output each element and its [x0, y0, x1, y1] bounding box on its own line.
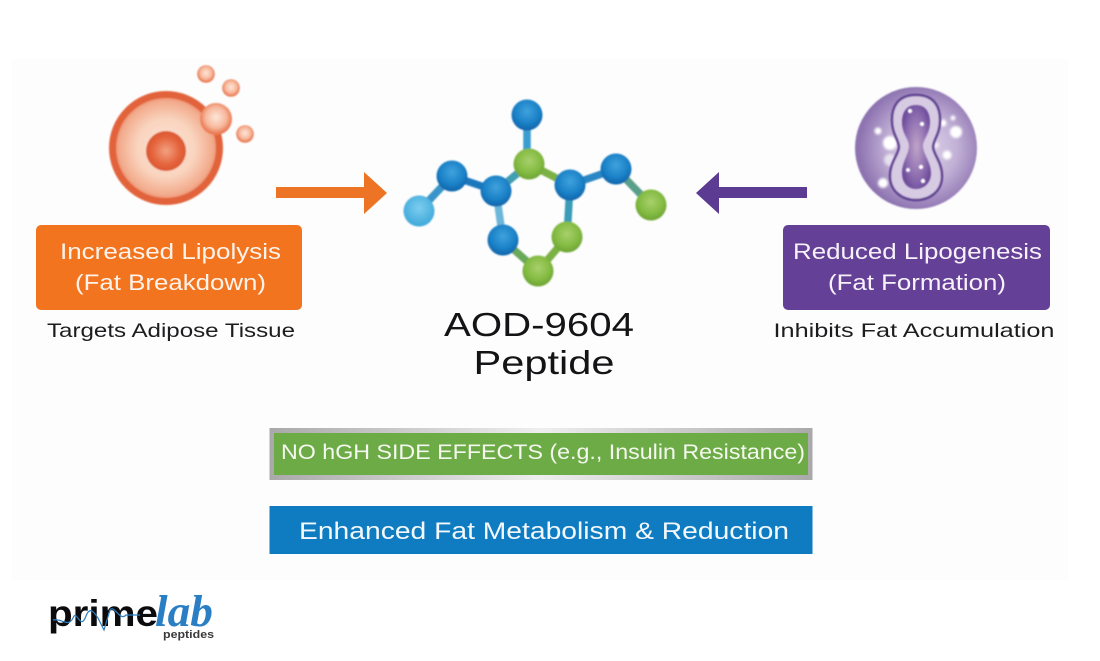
title: Peptide: [474, 345, 614, 382]
icon: fat cell: [112, 65, 254, 202]
dumbbell core: [902, 105, 931, 189]
title: AOD-9604: [444, 307, 634, 344]
logo: primelab peptides: peptides: [163, 629, 214, 641]
icon: molecule: [404, 100, 666, 286]
banner: enhanced fat metabolism: [270, 506, 812, 554]
banner: enhanced fat metabolism: Enhanced Fat Metabolism & Reduction: [299, 518, 789, 545]
icon: dividing fat droplet: [855, 87, 977, 209]
panel: reduced lipogenesis: (Fat Formation): [828, 270, 1006, 295]
panel: increased lipolysis: [36, 225, 302, 310]
arrow: orange right: [276, 172, 387, 214]
logo: primelab peptides: [48, 587, 214, 641]
panel: reduced lipogenesis: [783, 225, 1050, 310]
text: targets adipose tissue: Targets Adipose Tissue: [47, 320, 295, 342]
logo: primelab peptides: lab: [155, 587, 213, 636]
banner: no hGH side effects: NO hGH SIDE EFFECTS (e.g., Insulin Resistance): [281, 441, 805, 464]
arrow: purple left: [696, 172, 807, 214]
text: inhibits fat accumulation: Inhibits Fat Accumulation: [774, 320, 1054, 342]
dumbbell outer membrane: [890, 95, 942, 200]
panel: increased lipolysis: Increased Lipolysis: [60, 239, 281, 264]
banner: no hGH side effects: [270, 428, 812, 480]
panel: reduced lipogenesis: Reduced Lipogenesis: [793, 239, 1042, 264]
title: [444, 307, 634, 382]
logo: primelab peptides: prime: [48, 593, 158, 634]
panel: increased lipolysis: (Fat Breakdown): [75, 270, 266, 295]
